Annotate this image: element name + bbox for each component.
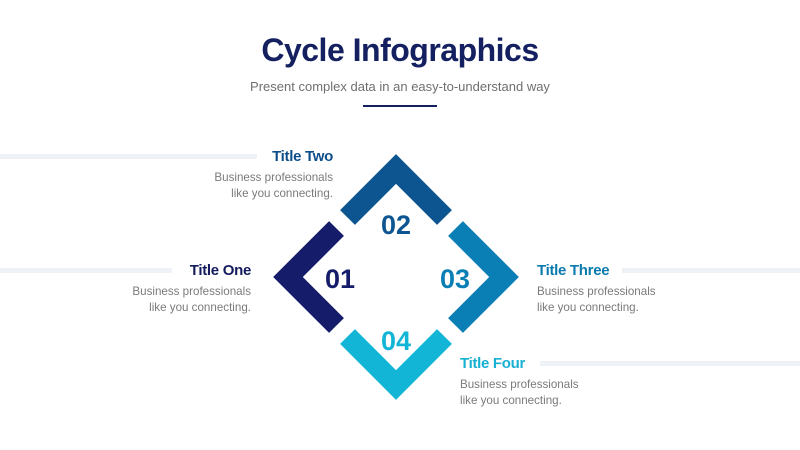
text block: Title Two: Title Two [272, 148, 333, 165]
text block: Title One: like you connecting. [149, 301, 251, 314]
text block: Title Two [214, 148, 333, 200]
chevron 01: 01 [325, 264, 355, 294]
text block: Title Three: like you connecting. [537, 301, 639, 314]
chevron 01 [288, 228, 355, 326]
title: Cycle Infographics [261, 32, 539, 68]
text block: Title Four: like you connecting. [460, 394, 562, 407]
text block: Title Four: Title Four [460, 355, 525, 372]
chevron 04 [348, 326, 444, 385]
text block: Title Three: Title Three [537, 262, 609, 279]
text block: Title Two: like you connecting. [231, 187, 333, 200]
text block: Title Three: Business professionals [537, 285, 656, 298]
text block: Title Three [537, 262, 656, 314]
text block: Title Two: Business professionals [214, 171, 333, 184]
text block: Title Four [460, 355, 579, 407]
chevron 02 [348, 169, 444, 240]
chevron 04: 04 [381, 326, 411, 356]
subtitle: Present complex data in an easy-to-understand way [250, 79, 550, 94]
text block: Title One [132, 262, 251, 314]
title underline [363, 105, 437, 107]
chevron 03 [440, 228, 504, 326]
chevron 02: 02 [381, 210, 411, 240]
text block: Title One: Title One [190, 262, 251, 279]
text block: Title One: Business professionals [132, 285, 251, 298]
chevron 03: 03 [440, 264, 470, 294]
text block: Title Four: Business professionals [460, 378, 579, 391]
